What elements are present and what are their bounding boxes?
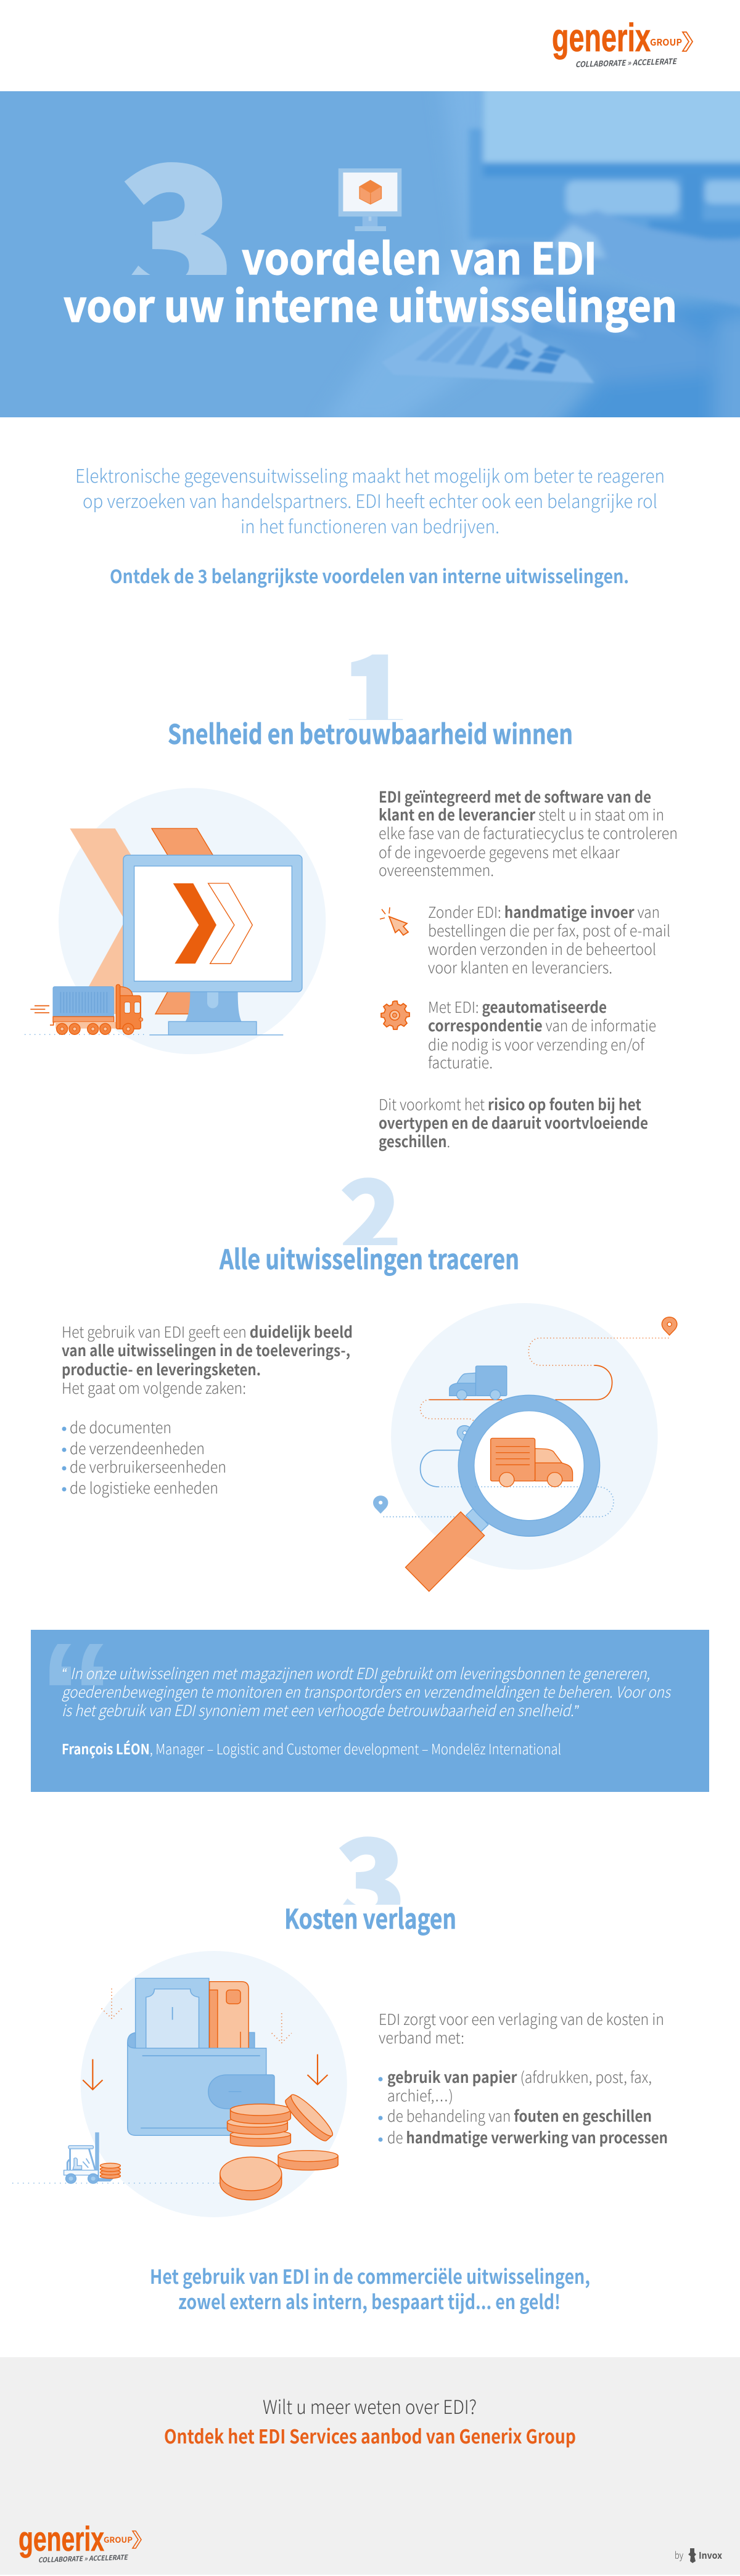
- dotted ground: [12, 2182, 220, 2185]
- section 2 paragraph: productie- en leveringsketen.: [62, 1358, 261, 1380]
- bullet list: traced items: de logistieke eenheden: [70, 1476, 218, 1499]
- credit: by Invox: by: [675, 2547, 683, 2562]
- text: with EDI: die nodig is voor verzending en/of: [428, 1033, 645, 1055]
- quote author: François LÉON, Manager – Logistic and Customer development – Mondelēz International: [62, 1738, 561, 1759]
- section 1 paragraph: overeenstemmen.: [379, 859, 494, 881]
- dotted arrows: [102, 1989, 292, 2043]
- panel: hero banner: [0, 91, 740, 417]
- big chevrons: [70, 828, 252, 1014]
- text: risk conclusion: Dit voorkomt het risico op fouten bij het: [379, 1093, 641, 1115]
- logo: Generix Group top: generix: [552, 15, 651, 60]
- quote text: “ In onze uitwisselingen met magazijnen wordt EDI gebruikt om leveringsbonnen te genereren,: [62, 1662, 650, 1684]
- hero big number 3: 3: [118, 83, 236, 363]
- section 2 number: 2: [340, 1136, 401, 1283]
- text: without EDI: [428, 901, 670, 978]
- text: without EDI: bestellingen die per fax, post of e-mail: [428, 919, 670, 941]
- flat coin: [278, 2151, 338, 2170]
- text: with EDI: Met EDI: geautomatiseerde: [428, 996, 607, 1018]
- bullet list: traced items: de verbruikerseenheden: [70, 1455, 226, 1478]
- section 2 paragraph: van alle uitwisselingen in de toeleverings-,: [62, 1339, 350, 1361]
- monitor: [123, 855, 302, 1035]
- bullet list: traced items: de verzendeenheden: [70, 1437, 205, 1459]
- text: without EDI: worden verzonden in de beheertool: [428, 938, 656, 960]
- bullet list: cost items: de handmatige verwerking van processen: [387, 2126, 668, 2148]
- intro text: op verzoeken van handelspartners. EDI heeft echter ook een belangrijke rol: [83, 486, 657, 513]
- quote text: [62, 1662, 672, 1721]
- text: with EDI: facturatie.: [428, 1051, 493, 1073]
- section 1 paragraph: klant en de leverancier stelt u in staat om in: [379, 803, 664, 825]
- text: with EDI: correspondentie van de informatie: [428, 1014, 656, 1036]
- icon: cursor click: [380, 907, 408, 935]
- panel: customer quote: [31, 1613, 709, 1792]
- footer question: Wilt u meer weten over EDI?: [263, 2392, 477, 2419]
- logo: Generix Group bottom: COLLABORATE » ACCELERATE: [38, 2552, 129, 2565]
- section 2 paragraph: Het gebruik van EDI geeft een duidelijk beeld: [62, 1320, 353, 1343]
- pin: blue behind lens: [457, 1426, 472, 1444]
- title: voordelen van EDI: [242, 225, 597, 287]
- icon: monitor with orange cube: [339, 168, 401, 231]
- title: voor uw interne uitwisselingen: [64, 272, 677, 335]
- icon: quote mark: “: [38, 1613, 115, 1776]
- section 2 paragraph: Het gaat om volgende zaken:: [62, 1376, 246, 1399]
- wallet: [128, 1978, 274, 2135]
- section 2 paragraph: [62, 1320, 353, 1399]
- section 3 number: 3: [335, 1789, 406, 1957]
- intro text: [75, 461, 665, 539]
- bullet list: cost items: [379, 2066, 668, 2148]
- section 2 heading: Alle uitwisselingen traceren: [219, 1238, 519, 1277]
- conclusion: zowel extern als intern, bespaart tijd... en geld!: [178, 2287, 561, 2315]
- intro call to action: Ontdek de 3 belangrijkste voordelen van interne uitwisselingen.: [110, 562, 629, 589]
- logo: Generix Group bottom: generix: [18, 2519, 104, 2558]
- illustration: monitor and truck: [25, 788, 326, 1054]
- bullet list: traced items: de documenten: [70, 1416, 171, 1438]
- section 1 number: 1: [341, 607, 409, 768]
- quote text: goederenbewegingen te monitoren en transportorders en verzendmeldingen te beheren. Voor ons: [62, 1680, 672, 1703]
- section 3 heading: Kosten verlagen: [284, 1897, 456, 1937]
- text: with EDI: [428, 996, 656, 1073]
- section 1 paragraph: of de ingevoerde gegevens met elkaar: [379, 841, 620, 863]
- intro text: in het functioneren van bedrijven.: [240, 512, 500, 539]
- conclusion: [150, 2262, 590, 2315]
- text: risk conclusion: overtypen en de daaruit voortvloeiende: [379, 1111, 648, 1134]
- bullet list: traced items: [62, 1416, 226, 1499]
- text: without EDI: voor klanten en leveranciers.: [428, 956, 612, 978]
- text: risk conclusion: [379, 1093, 648, 1152]
- section 3 text: verband met:: [379, 2026, 464, 2048]
- hero background: blurred keyboard photo: [339, 91, 740, 417]
- section 3 text: EDI zorgt voor een verlaging van de kosten in: [379, 2008, 664, 2030]
- pin: orange: [662, 1317, 677, 1335]
- solid arrows: [83, 2055, 327, 2090]
- credit: by Invox: [675, 2547, 723, 2563]
- coin stack: [228, 2104, 290, 2146]
- illustration: magnifier and delivery route: [373, 1303, 677, 1592]
- illustration: wallet and coins: [12, 1951, 347, 2217]
- logo: Generix Group bottom: GROUP: [104, 2533, 133, 2545]
- text: without EDI: Zonder EDI: handmatige invoer van: [428, 901, 660, 923]
- credit: by Invox: Invox: [699, 2549, 723, 2562]
- magnifier: [405, 1395, 600, 1592]
- tilted coin: [281, 2091, 337, 2145]
- conclusion: Het gebruik van EDI in de commerciële uitwisselingen,: [150, 2262, 590, 2290]
- intro text: Elektronische gegevensuitwisseling maakt het mogelijk om beter te reageren: [75, 461, 665, 488]
- section 1 paragraph: elke fase van de facturatiecyclus te controleren: [379, 822, 678, 844]
- title: [64, 225, 677, 335]
- bullet list: cost items: de behandeling van fouten en geschillen: [387, 2104, 652, 2127]
- bullet list: cost items: gebruik van papier (afdrukken, post, fax,: [387, 2066, 652, 2088]
- section 3 text: [379, 2008, 664, 2048]
- panel: footer call to action: [0, 2357, 740, 2575]
- logo: Generix Group top: GROUP: [650, 36, 682, 49]
- text: risk conclusion: geschillen.: [379, 1130, 450, 1152]
- section 1 heading: Snelheid en betrouwbaarheid winnen: [168, 713, 573, 752]
- section 1 paragraph: EDI geïntegreerd met de software van de: [379, 785, 651, 808]
- orange truck: [491, 1438, 573, 1487]
- big coin: [220, 2157, 282, 2200]
- truck: [30, 984, 143, 1034]
- route lines: [383, 1338, 669, 1517]
- logo: Generix Group top: COLLABORATE » ACCELERATE: [575, 55, 678, 70]
- quote text: is het gebruik van EDI synoniem met een verhoogde betrouwbaarheid en snelheid.”: [62, 1699, 580, 1721]
- forklift: [64, 2132, 120, 2183]
- icon: gear: [381, 1001, 409, 1029]
- section 1 paragraph: [379, 785, 678, 881]
- footer link: Ontdek het EDI Services aanbod van Generix Group: [164, 2421, 576, 2449]
- blue truck: [450, 1366, 507, 1400]
- pin: blue left: [373, 1495, 388, 1514]
- bullet list: cost items: archief,…): [387, 2084, 453, 2106]
